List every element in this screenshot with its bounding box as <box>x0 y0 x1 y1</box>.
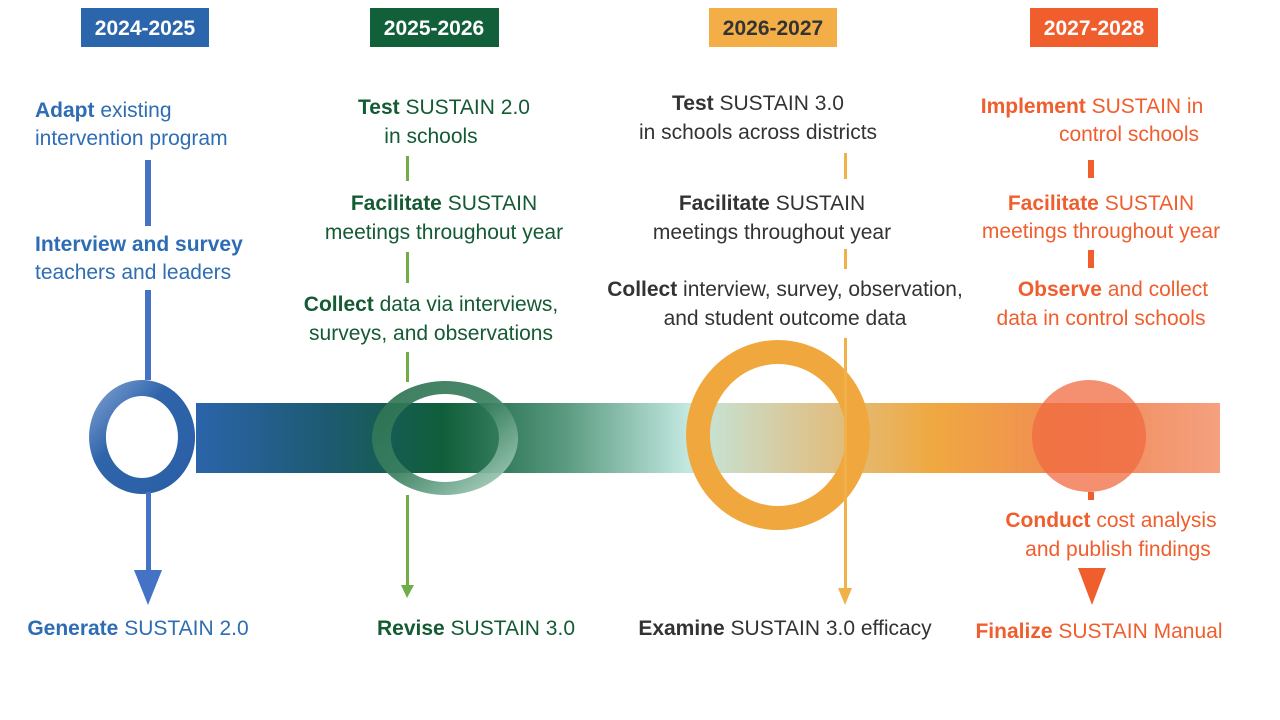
column 3 text <box>607 92 963 640</box>
column 4 text: control schools <box>1059 123 1199 146</box>
column 1 text: Generate SUSTAIN 2.0 <box>27 617 249 640</box>
column 4 text: data in control schools <box>997 307 1205 330</box>
column 2 text: surveys, and observations <box>309 322 553 345</box>
header: 2026-2027: 2026-2027 <box>723 17 823 40</box>
header: 2027-2028 <box>1030 8 1158 47</box>
column 3 text: and student outcome data <box>664 307 907 330</box>
column 2 text: Collect data via interviews, <box>304 293 558 316</box>
column 4 text: Implement SUSTAIN in <box>981 95 1203 118</box>
column 4 text <box>975 95 1223 643</box>
column 1 text: intervention program <box>35 127 228 150</box>
header: 2025-2026: 2025-2026 <box>384 17 484 40</box>
column 4 text: Facilitate SUSTAIN <box>1008 192 1194 215</box>
column 1 text <box>27 99 249 640</box>
column 2 text: Facilitate SUSTAIN <box>351 192 537 215</box>
column 3 connectors and arrow <box>838 153 852 605</box>
column 3 text: Examine SUSTAIN 3.0 efficacy <box>638 617 932 640</box>
circle: 2026-2027 ring <box>686 340 870 530</box>
column 1 connectors and arrow <box>134 160 162 605</box>
column 2 connectors and arrow <box>401 156 414 598</box>
column 2 text: in schools <box>384 125 478 148</box>
header: 2025-2026 <box>370 8 499 47</box>
circle: 2025-2026 ring <box>372 381 518 495</box>
column 3 text: Facilitate SUSTAIN <box>679 192 865 215</box>
column 4 text: Observe and collect <box>1018 278 1208 301</box>
header: 2024-2025 <box>81 8 209 47</box>
column 1 text: Adapt existing <box>35 99 172 122</box>
circle: 2027-2028 filled <box>1032 380 1146 492</box>
header: 2027-2028: 2027-2028 <box>1044 17 1145 40</box>
header: 2026-2027 <box>709 8 837 47</box>
column 4 text: Conduct cost analysis <box>1005 509 1217 532</box>
header: 2024-2025: 2024-2025 <box>95 17 196 40</box>
timeline band <box>196 403 1220 473</box>
column 2 text: Test SUSTAIN 2.0 <box>358 96 530 119</box>
column 4 text: meetings throughout year <box>982 220 1220 243</box>
column 2 text <box>304 96 575 640</box>
column 1 text: Interview and survey <box>35 233 243 256</box>
column 3 text: Test SUSTAIN 3.0 <box>672 92 844 115</box>
column 4 text: and publish findings <box>1025 538 1211 561</box>
column 3 text: in schools across districts <box>639 121 877 144</box>
column 4 connectors and arrow <box>1078 160 1106 605</box>
column 1 text: teachers and leaders <box>35 261 231 284</box>
column 4 text: Finalize SUSTAIN Manual <box>975 620 1223 643</box>
column 3 text: Collect interview, survey, observation, <box>607 278 963 301</box>
column 2 text: meetings throughout year <box>325 221 563 244</box>
column 2 text: Revise SUSTAIN 3.0 <box>377 617 575 640</box>
circle: 2024-2025 ring <box>89 380 195 494</box>
column 3 text: meetings throughout year <box>653 221 891 244</box>
